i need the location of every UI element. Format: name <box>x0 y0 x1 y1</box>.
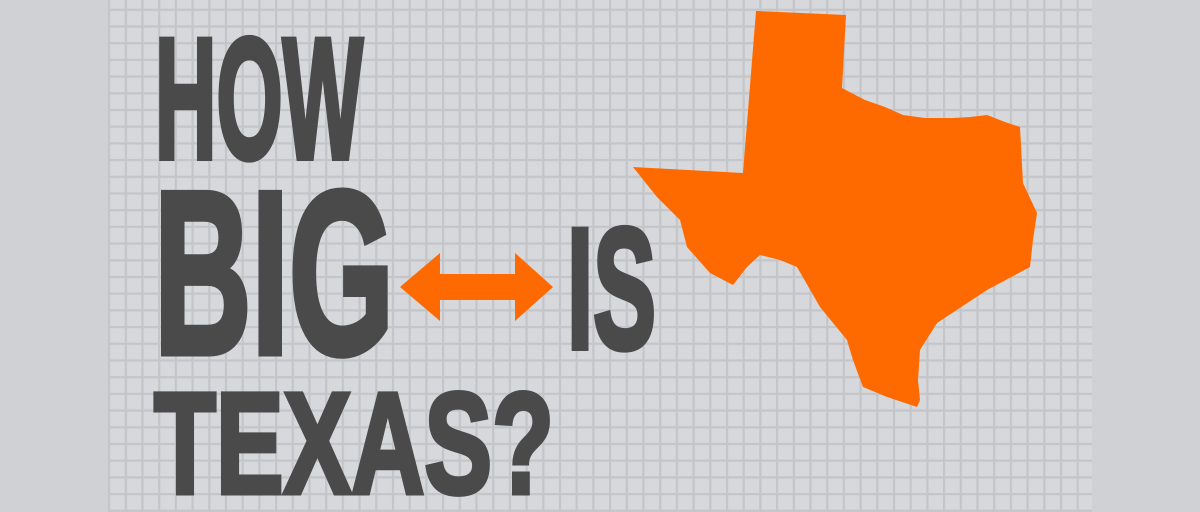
text: HOW <box>155 3 363 195</box>
arrow: double-headed <box>400 253 553 321</box>
map: Texas <box>633 11 1037 407</box>
title: BIG: BIG <box>154 144 394 403</box>
title: IS: IS <box>567 193 656 385</box>
